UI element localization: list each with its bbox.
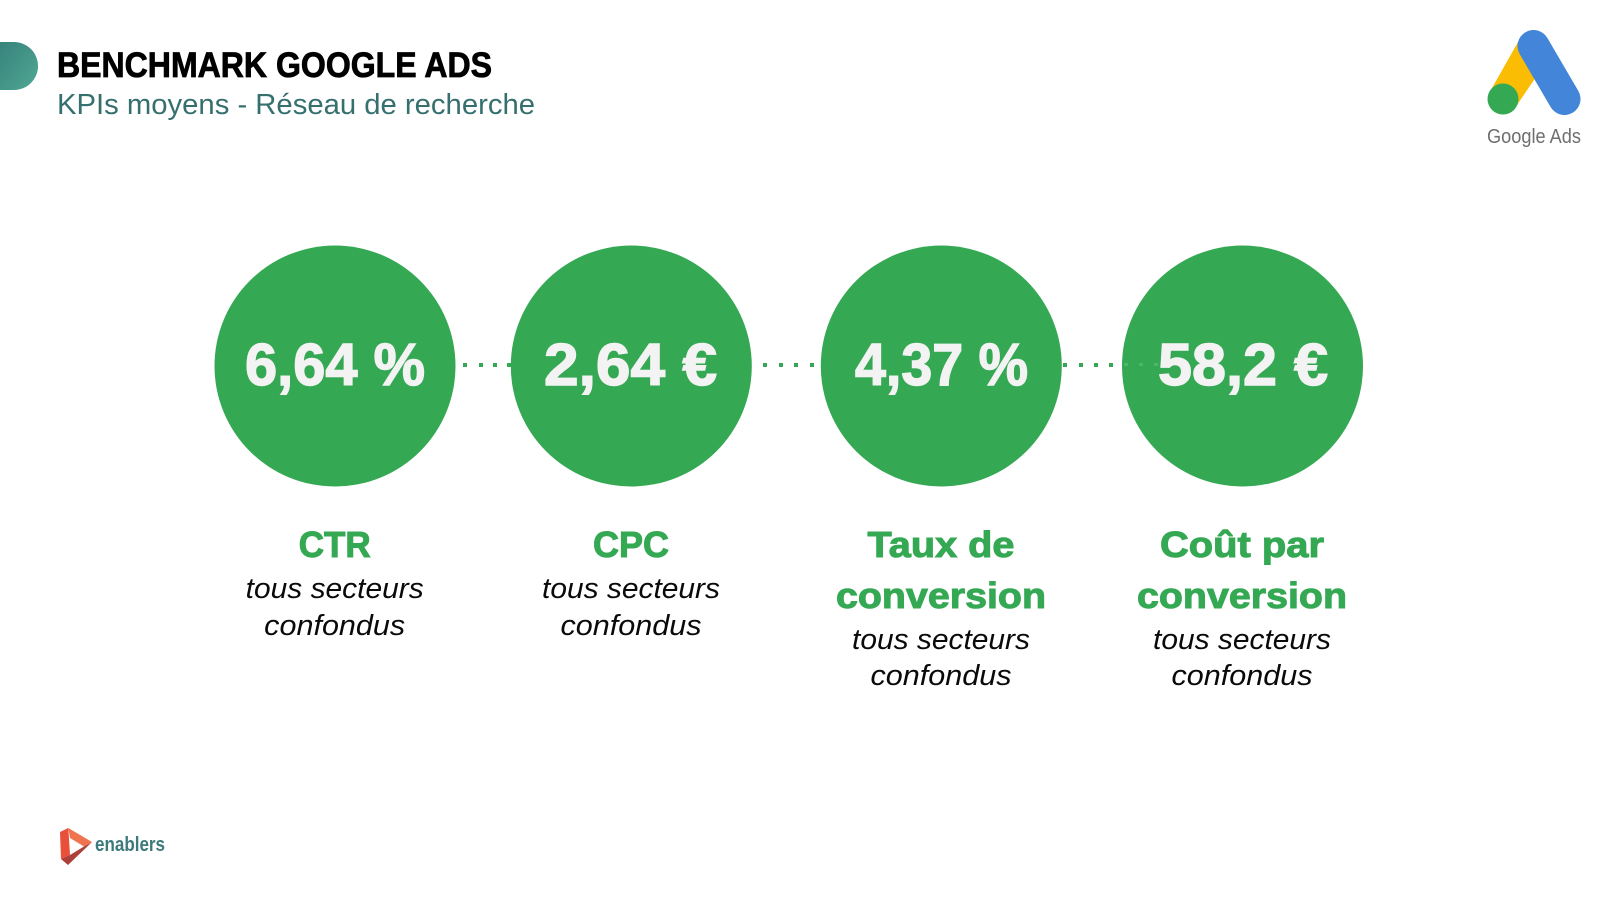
label: Taux de conversion: confondus [870,660,1012,692]
KPI circle: cost per conversion [1122,246,1363,486]
label: Taux de conversion: conversion [836,575,1046,616]
label: CTR [246,524,424,642]
subtitle: KPIs moyens - Réseau de recherche [57,89,535,121]
label: CPC: tous secteurs [542,573,720,605]
icon: enablers logo: enablers [95,834,165,856]
connector dots 3 [1063,363,1113,367]
label: Coût par conversion: Coût par [1160,524,1324,565]
icon: Google Ads logo: Google Ads [1487,126,1581,148]
label: Taux de conversion: Taux de [868,524,1014,565]
connector dots 2 [763,363,814,367]
connector dots 1 [463,363,511,367]
KPI circle: CPC [511,246,752,486]
label: Coût par conversion: confondus [1172,660,1312,692]
KPI circle: conversion rate [821,246,1062,486]
label: CPC: CPC [593,524,669,565]
label: CTR: tous secteurs [246,573,424,605]
label: Taux de conversion [836,524,1046,692]
KPI circle: CTR: 6,64 % [245,332,425,398]
label: Coût par conversion [1137,524,1347,692]
title: BENCHMARK GOOGLE ADS [57,46,492,85]
label: CTR: CTR [299,524,371,565]
KPI circle: cost per conversion: 58,2 € [1158,332,1328,398]
label: CTR: confondus [264,610,405,642]
label: CPC: confondus [560,610,702,642]
label: Taux de conversion: tous secteurs [852,624,1030,656]
icon: Google Ads logo [1487,42,1581,148]
label: CPC [542,524,720,642]
KPI circle: CPC: 2,64 € [544,332,717,398]
label: Coût par conversion: tous secteurs [1153,624,1331,656]
label: Coût par conversion: conversion [1137,575,1347,616]
KPI circle: CTR [214,246,456,486]
KPI circle: conversion rate: 4,37 % [855,332,1028,398]
header badge [0,42,38,90]
icon: enablers logo [60,828,165,865]
